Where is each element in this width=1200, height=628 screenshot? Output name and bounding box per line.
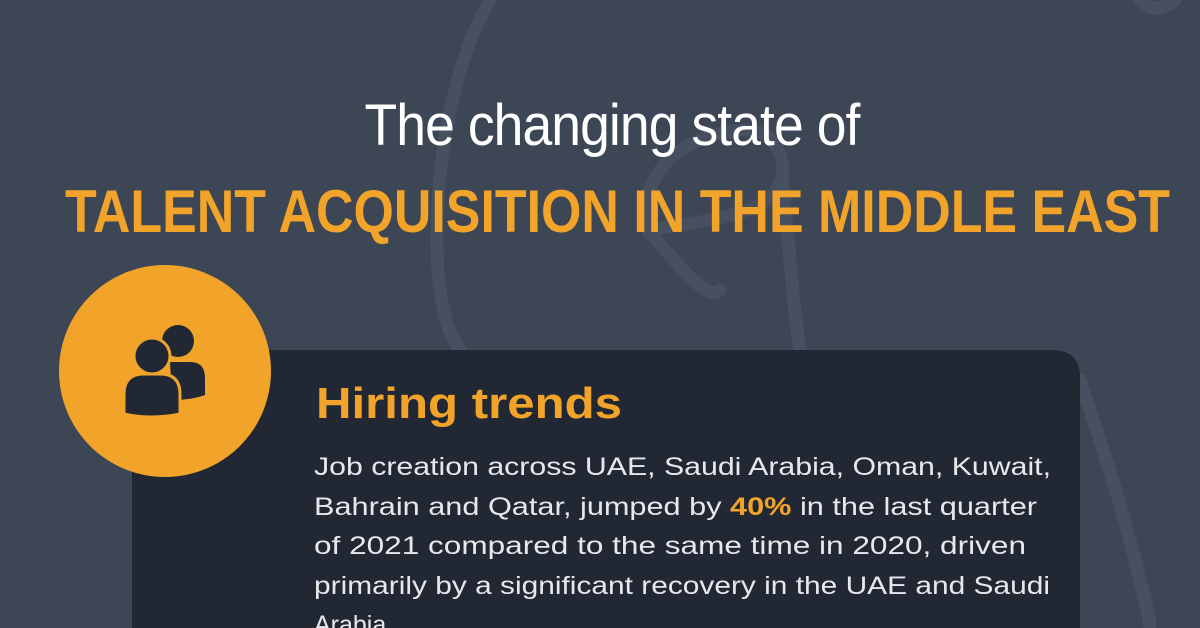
- decorative map outline: [437, 0, 1175, 628]
- body text: primarily by a significant recovery in the UAE and Saudi: [314, 572, 1050, 600]
- body text: [314, 453, 1051, 628]
- body text: of 2021 compared to the same time in 2020, driven: [314, 532, 1026, 560]
- title line 1: The changing state of: [364, 93, 861, 158]
- heading: Hiring trends: [316, 379, 622, 428]
- body text: Job creation across UAE, Saudi Arabia, Oman, Kuwait,: [314, 453, 1051, 481]
- body text: Bahrain and Qatar, jumped by 40% in the last quarter: [314, 493, 1037, 521]
- panel: hiring trends: [132, 350, 1080, 628]
- icon: people circle: [59, 265, 271, 477]
